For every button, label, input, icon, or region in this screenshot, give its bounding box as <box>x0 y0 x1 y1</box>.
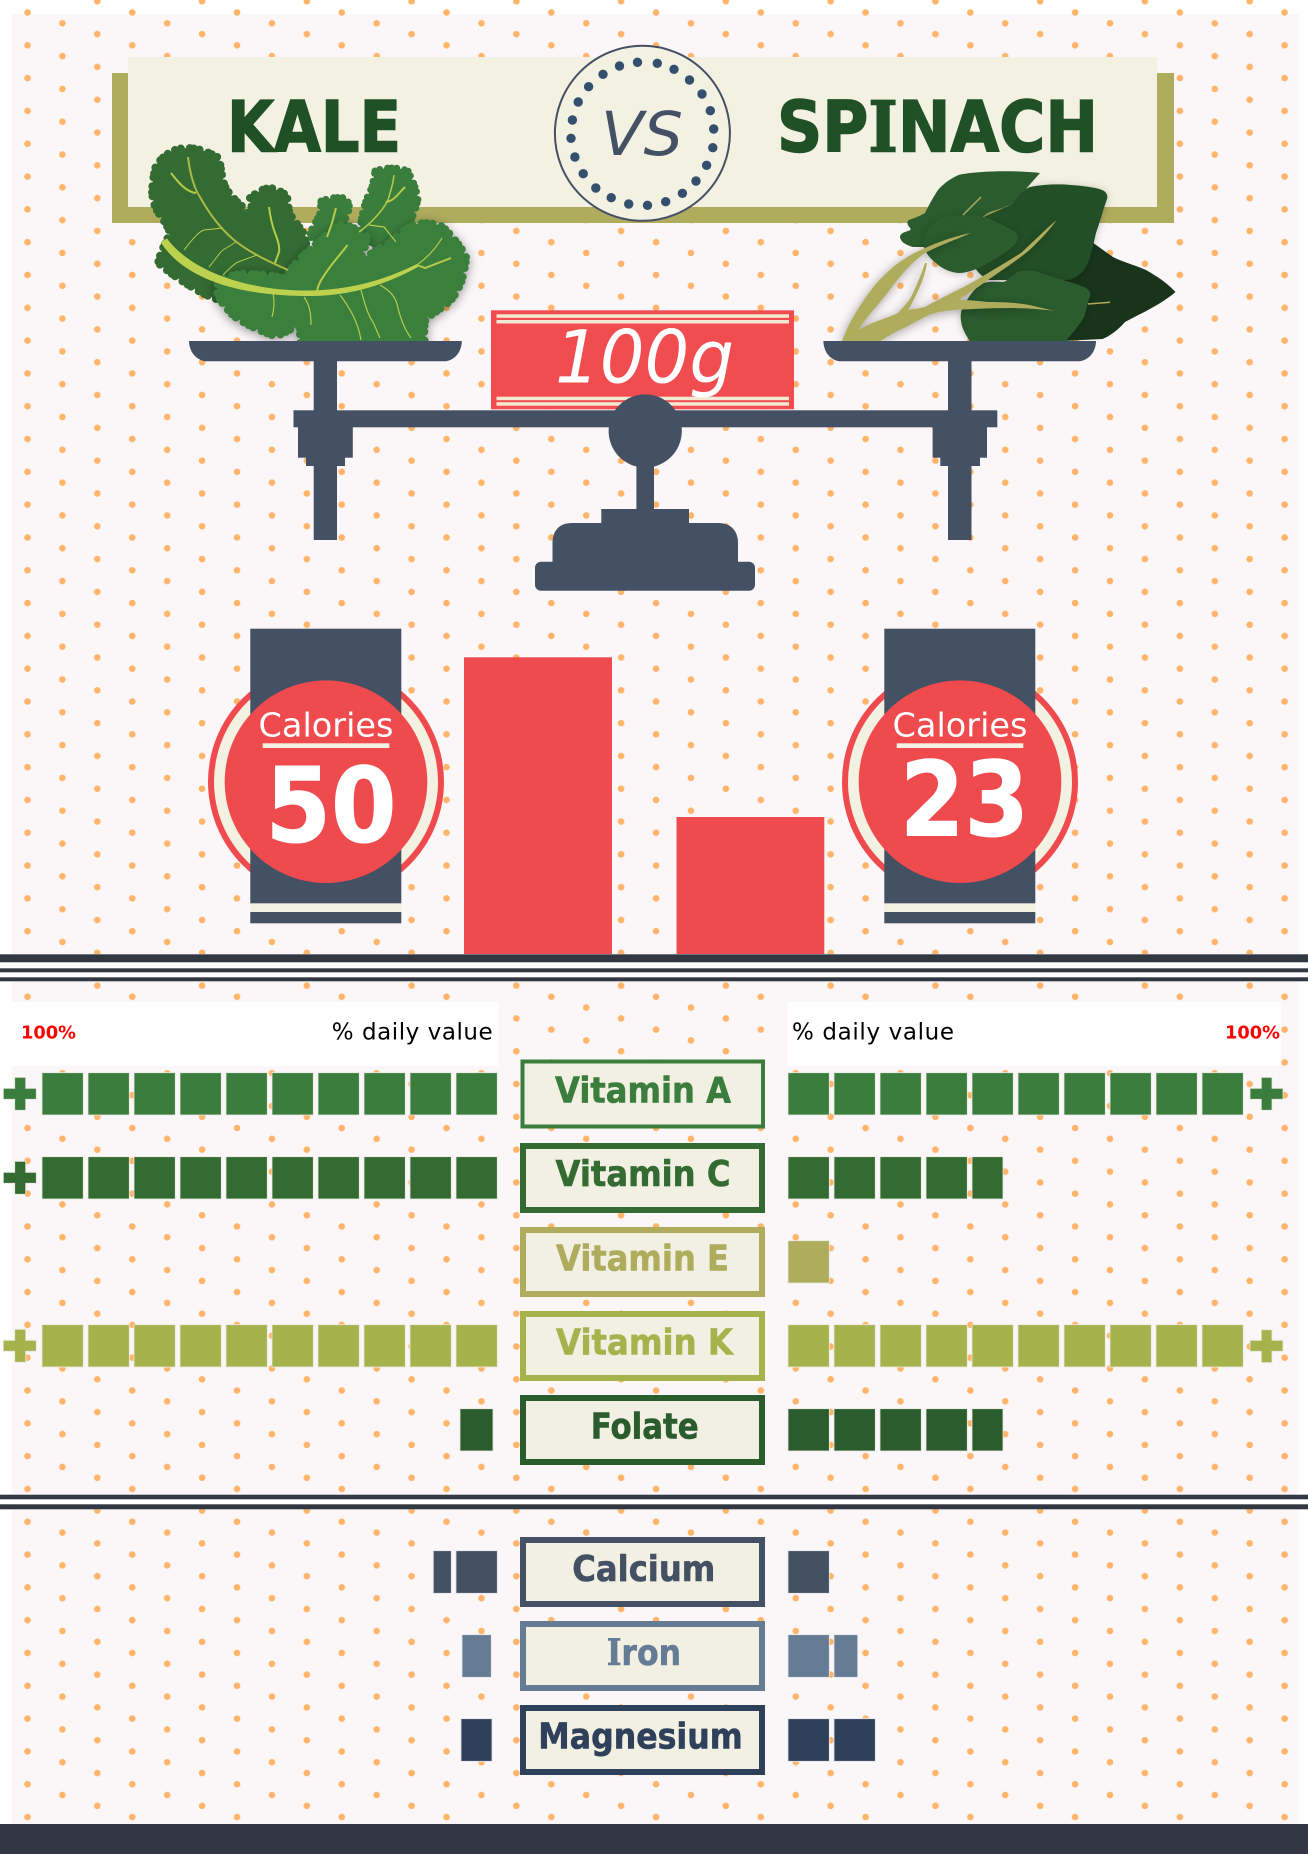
legend right: % daily value <box>792 1019 954 1045</box>
vitamin e row <box>523 1230 829 1294</box>
calories badge: kale 50: Calories <box>258 706 394 745</box>
legend left <box>11 1002 498 1066</box>
legend right <box>788 1002 1281 1066</box>
vitamin a row <box>3 1062 1283 1126</box>
header banner <box>112 57 1174 223</box>
iron row <box>462 1624 858 1688</box>
weight label: 100g <box>491 310 794 409</box>
legend left: % daily value <box>332 1019 493 1045</box>
illustration: spinach <box>842 171 1176 345</box>
vitamin c row <box>3 1146 1003 1210</box>
kale stem <box>160 238 418 296</box>
left pan <box>189 341 462 361</box>
folate row <box>460 1398 1003 1462</box>
scale <box>294 355 997 591</box>
right pan <box>823 341 1096 361</box>
vitamin c row: Vitamin C <box>556 1154 730 1195</box>
vitamin k row: Vitamin K <box>556 1322 734 1364</box>
vitamin k row <box>3 1314 1283 1378</box>
calories badge: spinach 23: Calories <box>892 706 1028 745</box>
kale leaves upper <box>310 168 418 249</box>
calories badge: spinach 23: 23 <box>900 740 1029 860</box>
calcium row: Calcium <box>572 1549 715 1590</box>
spinach stems <box>842 220 1057 341</box>
kale front leaf <box>217 223 466 345</box>
calcium row <box>433 1540 829 1604</box>
legend left: 100% <box>21 1023 76 1044</box>
legend right: 100% <box>1225 1023 1280 1044</box>
calories badge: kale 50: 50 <box>266 746 396 866</box>
kale veins <box>171 157 451 340</box>
vitamin e row: Vitamin E <box>556 1239 729 1280</box>
vitamin a row: Vitamin A <box>555 1071 731 1112</box>
calories badge: spinach 23 <box>842 629 1078 923</box>
footer bar <box>0 1824 1308 1854</box>
magnesium row <box>461 1708 875 1772</box>
calorie bars <box>464 657 824 955</box>
magnesium row: Magnesium <box>538 1717 743 1758</box>
vs text: VS <box>601 99 683 170</box>
iron row: Iron <box>607 1632 681 1674</box>
calories badge: kale 50 <box>208 629 444 923</box>
weight label: 100g: 100g <box>555 315 734 400</box>
vs badge <box>555 46 730 221</box>
folate row: Folate <box>591 1407 699 1448</box>
heading: kale: KALE <box>227 86 401 168</box>
heading: spinach: SPINACH <box>777 86 1098 168</box>
scale pivot <box>609 394 682 468</box>
illustration: kale <box>152 148 466 345</box>
